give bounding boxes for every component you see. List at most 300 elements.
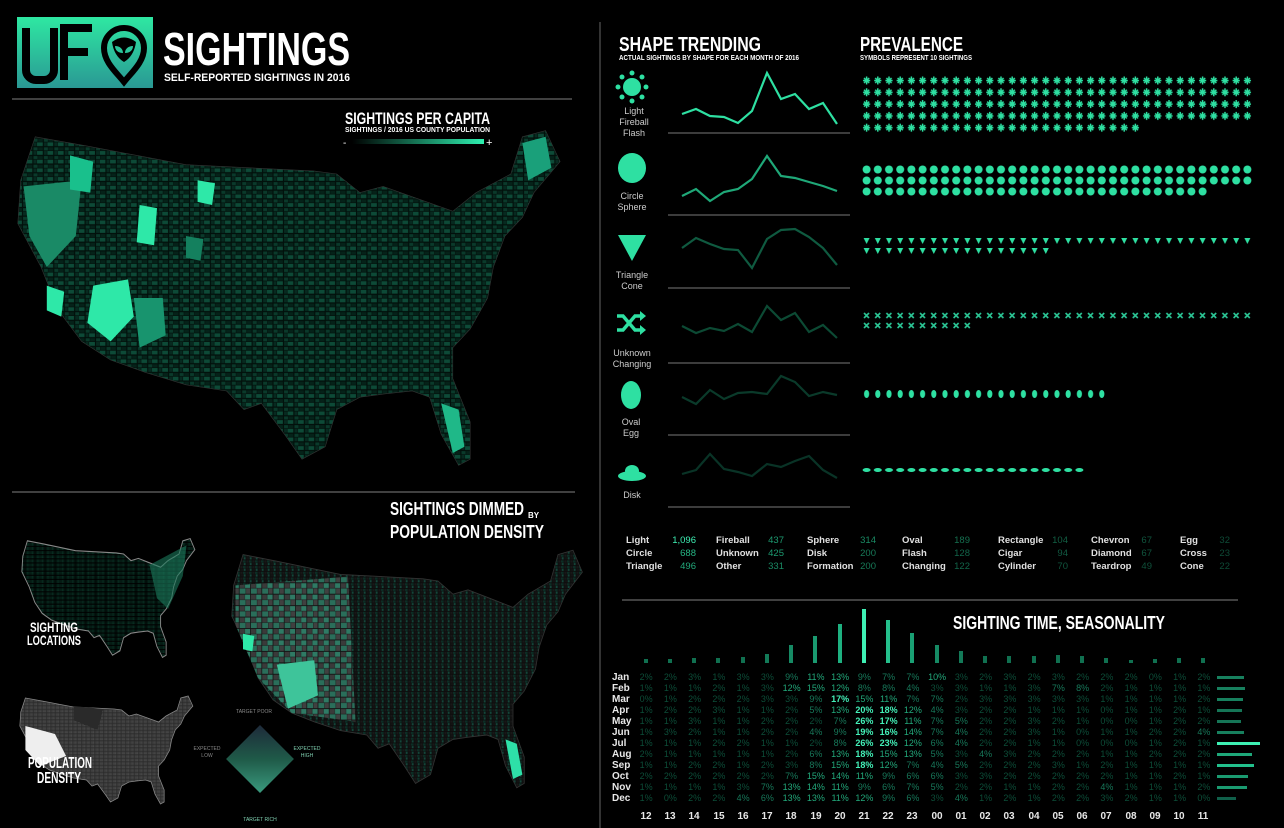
heatmap table: 2%	[1003, 793, 1016, 803]
month labels: Sep	[612, 760, 630, 771]
month labels: Mar	[612, 694, 630, 705]
totals table: 1,096	[672, 535, 696, 546]
heatmap table: 1%	[1100, 694, 1113, 704]
per capita legend	[343, 109, 492, 149]
heatmap table: 2%	[712, 738, 725, 748]
heatmap table: 3%	[737, 672, 750, 682]
hour axis: 14	[688, 811, 700, 822]
heatmap table: 15%	[831, 760, 849, 770]
map: population density	[20, 696, 193, 804]
heatmap table: 0%	[1149, 672, 1162, 682]
totals table: Egg	[1180, 535, 1198, 546]
heatmap table: 1%	[1100, 749, 1113, 759]
heatmap table: 1%	[737, 683, 750, 693]
title block: SIGHTINGS	[163, 23, 350, 75]
heatmap table: 2%	[688, 727, 701, 737]
heatmap table: 3%	[1028, 716, 1041, 726]
heatmap table: 13%	[783, 793, 801, 803]
heatmap table: 7%	[906, 782, 919, 792]
heatmap table: 1%	[664, 749, 677, 759]
heatmap table: 17%	[831, 694, 849, 704]
heatmap table: 4%	[737, 793, 750, 803]
totals table: 128	[954, 548, 970, 559]
hour axis: 03	[1003, 811, 1015, 822]
heatmap table: 3%	[979, 771, 992, 781]
heatmap table: 7%	[931, 716, 944, 726]
row: triangle	[616, 229, 850, 291]
heatmap table: 4%	[955, 727, 968, 737]
heatmap table: 9%	[785, 672, 798, 682]
heatmap table: 1%	[640, 683, 653, 693]
totals table: Cone	[1180, 561, 1204, 572]
heatmap table: 1%	[1028, 705, 1041, 715]
totals table: 70	[1057, 561, 1068, 572]
heatmap table: 20%	[855, 705, 873, 715]
row: light: Fireball	[619, 117, 649, 127]
heatmap table: 1%	[664, 683, 677, 693]
hour axis: 17	[761, 811, 773, 822]
heatmap table: 8%	[809, 760, 822, 770]
totals table: Flash	[902, 548, 927, 559]
heatmap table: 2%	[1125, 793, 1138, 803]
heatmap table: 2%	[712, 760, 725, 770]
totals table: 425	[768, 548, 784, 559]
totals table: Other	[716, 561, 742, 572]
heatmap table: 15%	[807, 683, 825, 693]
heatmap table: 2%	[1197, 672, 1210, 682]
month bar chart	[1217, 676, 1260, 800]
heatmap table: 11%	[831, 793, 849, 803]
heatmap table: 2%	[979, 672, 992, 682]
heatmap table: 1%	[1028, 738, 1041, 748]
heatmap table: 1%	[640, 727, 653, 737]
heatmap table: 9%	[834, 727, 847, 737]
heatmap table: 7%	[785, 771, 798, 781]
heatmap table: 1%	[1125, 771, 1138, 781]
totals table: Cigar	[998, 548, 1023, 559]
heatmap table: 4%	[1197, 727, 1210, 737]
heatmap table: 2%	[712, 694, 725, 704]
heatmap table: 1%	[1197, 705, 1210, 715]
heatmap table: 2%	[664, 672, 677, 682]
hour axis: 18	[785, 811, 797, 822]
heatmap table: 2%	[1125, 672, 1138, 682]
prevalence: circles	[861, 164, 1253, 197]
heatmap table: 2%	[688, 771, 701, 781]
heatmap table: 2%	[809, 738, 822, 748]
per capita legend: -	[343, 138, 346, 149]
heatmap table: 6%	[809, 749, 822, 759]
heatmap table: 1%	[1052, 738, 1065, 748]
heatmap table: 2%	[1003, 716, 1016, 726]
heatmap table: 12%	[831, 683, 849, 693]
hour axis: 01	[955, 811, 967, 822]
heatmap table: 2%	[1076, 672, 1089, 682]
heatmap table: 0%	[640, 694, 653, 704]
heading: dimmed by density: SIGHTINGS DIMMED	[390, 499, 524, 519]
totals table: 67	[1141, 535, 1152, 546]
logo letters UF	[26, 28, 92, 80]
heatmap table: 1%	[1149, 716, 1162, 726]
heatmap table: 9%	[882, 793, 895, 803]
heatmap table: 1%	[664, 694, 677, 704]
row: disk: Disk	[623, 490, 641, 500]
per capita legend: +	[486, 137, 492, 149]
heatmap table: 2%	[1100, 683, 1113, 693]
heatmap table: 3%	[955, 672, 968, 682]
heatmap table: 4%	[955, 738, 968, 748]
heatmap table: 1%	[1149, 694, 1162, 704]
heatmap table: 0%	[1197, 793, 1210, 803]
hour axis: 05	[1052, 811, 1064, 822]
hour axis	[640, 811, 1209, 822]
heatmap table: 18%	[855, 749, 873, 759]
hour axis: 07	[1100, 811, 1112, 822]
heatmap table: 1%	[737, 705, 750, 715]
heatmap table: 2%	[1052, 716, 1065, 726]
heatmap table: 2%	[761, 727, 774, 737]
heatmap table: 26%	[855, 738, 873, 748]
hour axis: 12	[640, 811, 652, 822]
heatmap table: 15%	[807, 771, 825, 781]
heatmap table: 2%	[1003, 727, 1016, 737]
heatmap table: 1%	[1076, 716, 1089, 726]
heatmap table: 3%	[712, 705, 725, 715]
hour axis: 19	[810, 811, 822, 822]
heatmap table: 2%	[1003, 760, 1016, 770]
totals table: Cross	[1180, 548, 1207, 559]
heading: shape trending: ACTUAL SIGHTINGS BY SHAPE FOR EACH MONTH OF 2016	[619, 55, 799, 62]
heatmap table: 3%	[955, 683, 968, 693]
row: disk	[618, 454, 850, 507]
heatmap table: 2%	[785, 716, 798, 726]
heatmap table: 12%	[783, 683, 801, 693]
heatmap table: 2%	[761, 771, 774, 781]
hour axis: 00	[931, 811, 943, 822]
heatmap table: 2%	[1173, 771, 1186, 781]
hour axis: 16	[737, 811, 749, 822]
heatmap table: 10%	[928, 672, 946, 682]
heatmap table: 3%	[761, 694, 774, 704]
heatmap table: 11%	[904, 716, 922, 726]
totals table: 23	[1219, 548, 1230, 559]
heatmap table: 0%	[1100, 738, 1113, 748]
heatmap table: 11%	[880, 694, 897, 704]
heatmap table: 2%	[955, 782, 968, 792]
totals table: Oval	[902, 535, 923, 546]
heatmap table: 1%	[785, 738, 798, 748]
heatmap table: 2%	[737, 738, 750, 748]
totals table: 122	[954, 561, 970, 572]
prevalence: oval	[861, 388, 1108, 400]
heatmap table: 6%	[906, 771, 919, 781]
heatmap table: 1%	[1052, 727, 1065, 737]
heatmap table: 1%	[1173, 793, 1186, 803]
label: population density: DENSITY	[37, 770, 81, 787]
heatmap table: 2%	[712, 793, 725, 803]
heatmap table: 2%	[785, 705, 798, 715]
legend: diamond: EXPECTED	[194, 746, 221, 752]
heatmap table: 3%	[785, 694, 798, 704]
month labels: Aug	[612, 749, 631, 760]
heatmap table: 2%	[1052, 793, 1065, 803]
heatmap table: 2%	[1197, 782, 1210, 792]
heatmap table: 2%	[1028, 749, 1041, 759]
heatmap table: 1%	[688, 738, 701, 748]
heatmap table: 1%	[1125, 683, 1138, 693]
heatmap table: 2%	[688, 760, 701, 770]
heatmap table: 1%	[664, 716, 677, 726]
row: triangle: Triangle	[616, 270, 648, 280]
month labels: May	[612, 716, 631, 727]
totals table: 437	[768, 535, 784, 546]
heatmap table: 5%	[931, 782, 944, 792]
heatmap table: 1%	[1149, 683, 1162, 693]
row: oval: Oval	[622, 417, 640, 427]
heatmap table: 7%	[761, 782, 774, 792]
heatmap table: 6%	[761, 793, 774, 803]
heatmap table: 2%	[712, 683, 725, 693]
heatmap table: 1%	[1028, 782, 1041, 792]
heatmap table: 2%	[1149, 727, 1162, 737]
heatmap table: 1%	[712, 672, 725, 682]
hour axis: 10	[1173, 811, 1185, 822]
row: light: Light	[624, 106, 644, 116]
heatmap table: 5%	[931, 749, 944, 759]
heatmap table: 2%	[1028, 771, 1041, 781]
heatmap table: 2%	[664, 771, 677, 781]
heatmap table: 1%	[640, 716, 653, 726]
heatmap table: 4%	[931, 705, 944, 715]
heatmap table: 12%	[904, 738, 922, 748]
heatmap table: 2%	[1003, 771, 1016, 781]
heatmap table: 2%	[1173, 738, 1186, 748]
heatmap table: 3%	[785, 760, 798, 770]
row: unknown	[613, 306, 850, 369]
totals table: Rectangle	[998, 535, 1043, 546]
heatmap table: 13%	[831, 705, 849, 715]
row: oval	[621, 376, 850, 438]
heatmap table: 3%	[761, 672, 774, 682]
heatmap table: 3%	[1076, 694, 1089, 704]
row: unknown: Unknown	[613, 348, 651, 358]
heatmap table: 2%	[955, 694, 968, 704]
heatmap table: 1%	[1149, 782, 1162, 792]
heatmap table: 1%	[1173, 782, 1186, 792]
heatmap table: 2%	[979, 782, 992, 792]
heatmap table: 1%	[1149, 705, 1162, 715]
heatmap table: 2%	[1100, 672, 1113, 682]
totals table: 314	[860, 535, 876, 546]
heatmap table: 1%	[1197, 683, 1210, 693]
heatmap table: 1%	[1028, 793, 1041, 803]
heatmap table	[640, 672, 1210, 803]
label: sighting locations: SIGHTING	[30, 619, 78, 635]
row: triangle: Cone	[621, 281, 643, 291]
heatmap table: 3%	[1028, 694, 1041, 704]
heatmap table: 3%	[979, 694, 992, 704]
heatmap table: 0%	[1100, 716, 1113, 726]
hour bar chart	[644, 609, 1205, 663]
prevalence: triangles	[861, 236, 1253, 256]
heatmap table: 12%	[904, 705, 922, 715]
heatmap table: 2%	[1197, 694, 1210, 704]
heatmap table: 3%	[955, 705, 968, 715]
totals table: Fireball	[716, 535, 750, 546]
heading: dimmed by density	[390, 499, 544, 542]
legend: diamond: LOW	[201, 753, 213, 759]
prevalence: lights	[861, 75, 1253, 134]
hour axis: 13	[664, 811, 676, 822]
heatmap table: 1%	[1125, 760, 1138, 770]
heatmap table: 4%	[931, 760, 944, 770]
heatmap table: 4%	[955, 793, 968, 803]
heatmap table: 6%	[931, 771, 944, 781]
month labels: Dec	[612, 793, 630, 804]
heatmap table: 1%	[737, 749, 750, 759]
heatmap table: 2%	[1076, 793, 1089, 803]
heatmap table: 2%	[688, 793, 701, 803]
heatmap table: 7%	[1052, 683, 1065, 693]
heatmap table: 2%	[1003, 738, 1016, 748]
heatmap table: 3%	[955, 749, 968, 759]
heatmap table: 2%	[737, 771, 750, 781]
heatmap table: 8%	[858, 683, 871, 693]
totals table: Teardrop	[1091, 561, 1132, 572]
heatmap table: 3%	[1028, 683, 1041, 693]
heatmap table: 5%	[955, 716, 968, 726]
totals table: Light	[626, 535, 650, 546]
heatmap table: 3%	[1003, 694, 1016, 704]
heatmap table: 2%	[1173, 716, 1186, 726]
per capita legend: SIGHTINGS / 2016 US COUNTY POPULATION	[345, 127, 490, 134]
heatmap table: 1%	[761, 705, 774, 715]
heatmap table: 3%	[761, 683, 774, 693]
heatmap table: 2%	[979, 727, 992, 737]
heatmap table: 1%	[712, 749, 725, 759]
heatmap table: 0%	[1076, 727, 1089, 737]
hour axis: 22	[882, 811, 894, 822]
heading: shape trending: SHAPE TRENDING	[619, 34, 761, 56]
totals table: 49	[1141, 561, 1152, 572]
totals table: 688	[680, 548, 696, 559]
heatmap table: 7%	[906, 694, 919, 704]
hour axis: 04	[1028, 811, 1040, 822]
heatmap table: 2%	[979, 760, 992, 770]
heatmap table: 2%	[640, 771, 653, 781]
heatmap table: 2%	[1028, 672, 1041, 682]
heatmap table: 3%	[1052, 672, 1065, 682]
heatmap table: 23%	[880, 738, 898, 748]
heatmap table: 2%	[1052, 749, 1065, 759]
title block	[17, 17, 350, 88]
hour axis: 21	[858, 811, 870, 822]
heatmap table: 1%	[761, 749, 774, 759]
heatmap table: 1%	[1173, 694, 1186, 704]
heatmap table: 1%	[979, 683, 992, 693]
heatmap table: 1%	[979, 793, 992, 803]
heatmap table: 7%	[931, 694, 944, 704]
totals table: 104	[1052, 535, 1068, 546]
heatmap table: 1%	[1100, 727, 1113, 737]
heatmap table: 2%	[761, 716, 774, 726]
heatmap table: 1%	[1197, 771, 1210, 781]
heatmap table: 13%	[783, 782, 801, 792]
heatmap table: 9%	[809, 694, 822, 704]
heatmap table: 3%	[1100, 793, 1113, 803]
hour axis: 23	[906, 811, 918, 822]
totals table: 331	[768, 561, 784, 572]
heatmap table: 8%	[834, 738, 847, 748]
heatmap table: 4%	[979, 749, 992, 759]
heatmap table: 1%	[640, 705, 653, 715]
hour axis: 08	[1125, 811, 1137, 822]
heatmap table: 2%	[1076, 771, 1089, 781]
month labels: Feb	[612, 683, 630, 694]
heatmap table: 2%	[809, 716, 822, 726]
heading: prevalence: PREVALENCE	[860, 34, 963, 56]
heatmap table: 1%	[1003, 683, 1016, 693]
row: oval: Egg	[623, 428, 639, 438]
hour axis: 11	[1198, 811, 1209, 822]
per capita legend: SIGHTINGS PER CAPITA	[345, 109, 490, 128]
heatmap table: 18%	[855, 760, 873, 770]
heatmap table: 2%	[688, 694, 701, 704]
heatmap table: 3%	[1003, 749, 1016, 759]
heading: sighting time: SIGHTING TIME, SEASONALITY	[953, 613, 1165, 633]
heatmap table: 1%	[664, 738, 677, 748]
totals table: Chevron	[1091, 535, 1130, 546]
heatmap table: 18%	[880, 705, 898, 715]
heatmap table: 4%	[906, 683, 919, 693]
hour axis: 20	[834, 811, 846, 822]
prevalence: disk	[861, 466, 1085, 472]
row: circle	[617, 153, 850, 215]
heatmap table: 2%	[1173, 705, 1186, 715]
month labels: Jun	[612, 727, 630, 738]
heatmap table: 1%	[640, 738, 653, 748]
heatmap table: 1%	[1149, 760, 1162, 770]
heatmap table: 3%	[1028, 727, 1041, 737]
totals table: Disk	[807, 548, 828, 559]
heatmap table: 11%	[807, 672, 825, 682]
heatmap table: 2%	[664, 705, 677, 715]
heatmap table: 0%	[1076, 738, 1089, 748]
heatmap table: 11%	[831, 782, 849, 792]
legend: diamond	[194, 709, 321, 823]
totals table: 67	[1141, 548, 1152, 559]
totals table: 32	[1219, 535, 1230, 546]
heatmap table: 26%	[855, 716, 873, 726]
heading: prevalence: SYMBOLS REPRESENT 10 SIGHTINGS	[860, 55, 972, 62]
legend: diamond: TARGET RICH	[243, 817, 277, 823]
heatmap table: 2%	[1197, 749, 1210, 759]
heatmap table: 1%	[737, 716, 750, 726]
label: population density: POPULATION	[28, 755, 92, 772]
heatmap table: 3%	[931, 793, 944, 803]
heatmap table: 3%	[1052, 760, 1065, 770]
heatmap table: 1%	[1125, 749, 1138, 759]
totals table: 94	[1057, 548, 1068, 559]
heatmap table: 9%	[858, 672, 871, 682]
heatmap table: 1%	[1149, 771, 1162, 781]
row: circle: Sphere	[617, 202, 647, 212]
heatmap table: 2%	[1100, 771, 1113, 781]
heatmap table: 1%	[640, 793, 653, 803]
heatmap table: 5%	[809, 705, 822, 715]
heatmap table: 1%	[1076, 760, 1089, 770]
month labels: Apr	[612, 705, 629, 716]
